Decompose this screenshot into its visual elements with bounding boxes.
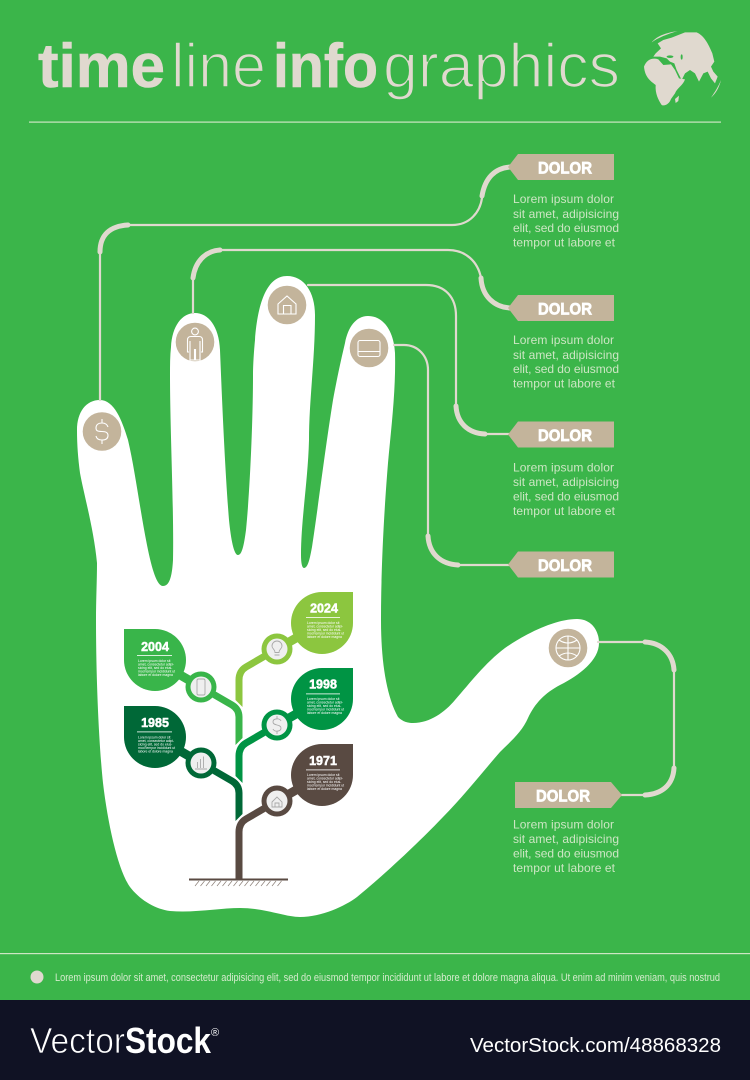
leaf text 1971: labore et dolore magna (307, 787, 342, 791)
tree branch 2024 (236, 592, 353, 707)
text block 2: sit amet, adipisicing (513, 348, 619, 362)
text block 1: sit amet, adipisicing (513, 207, 619, 221)
icon: basketball circle (549, 629, 587, 667)
watermark band (0, 1000, 750, 1080)
leaf text 2024 (306, 602, 344, 639)
icon: dollar (273, 716, 281, 734)
tag 2: DOLOR (538, 300, 592, 318)
leaf text 1985: labore et dolore magna (138, 750, 173, 754)
text block 1: tempor ut labore et (513, 236, 616, 250)
icon: house circle (268, 286, 306, 324)
tag 3 (508, 422, 614, 448)
tag 5 (515, 782, 622, 808)
icon: screen circle (350, 329, 388, 367)
text block 1: elit, sed do eiusmod (513, 221, 619, 235)
tree branch 1998 (236, 668, 353, 783)
leaf text 2004: Lorem ipsum dolor sit (138, 659, 170, 663)
leaf text 1971 (306, 754, 344, 791)
text block 3: elit, sed do eiusmod (513, 490, 619, 504)
title (38, 32, 620, 101)
tag 4: DOLOR (538, 557, 592, 575)
connector: ring finger to tag 2 (193, 250, 510, 313)
tag 3: DOLOR (538, 427, 592, 445)
logo: Vector (30, 1020, 125, 1061)
tree branch 1985 (124, 706, 242, 821)
leaf text 2004: 2004 (141, 640, 169, 654)
icon: bar chart (195, 756, 207, 769)
text block 3: sit amet, adipisicing (513, 475, 619, 489)
leaf text 2004: mod tempor incididunt ut (138, 670, 175, 674)
connector: middle finger to tag 3 (308, 285, 510, 434)
text block 2: tempor ut labore et (513, 376, 616, 390)
text block 2: Lorem ipsum dolor (513, 333, 614, 347)
leaf text 2004: amet, consectetur adipi- (138, 662, 174, 666)
icon: light bulb (272, 641, 282, 655)
header divider (29, 122, 721, 123)
connector: index finger to tag 4 (394, 345, 510, 565)
leaf text 2024: amet, consectetur adipi- (307, 624, 343, 628)
leaf text 1998: mod tempor incididunt ut (307, 708, 344, 712)
hand silhouette (77, 276, 599, 917)
tag 1: DOLOR (538, 160, 592, 178)
tag 1 (508, 154, 614, 180)
text block 3: tempor ut labore et (513, 504, 616, 518)
icon: globe (644, 31, 721, 105)
footer bullet (30, 970, 44, 984)
tree branch 2004 (124, 629, 242, 745)
icon: house (272, 797, 282, 807)
leaf text 2004: labore et dolore magna (138, 673, 173, 677)
tree trunk and branch 1971 (239, 744, 353, 879)
leaf text 1971: mod tempor incididunt ut (307, 784, 344, 788)
leaf text 1971: Lorem ipsum dolor sit (307, 773, 339, 777)
leaf text 2024: Lorem ipsum dolor sit (307, 621, 339, 625)
text block 5: elit, sed do eiusmod (513, 846, 619, 860)
leaf text 2024: labore et dolore magna (307, 635, 342, 639)
leaf text 2024: mod tempor incididunt ut (307, 632, 344, 636)
leaf text 1985 (137, 716, 175, 754)
logo (30, 1020, 219, 1061)
text block 5 (513, 818, 619, 875)
text block 5: sit amet, adipisicing (513, 832, 619, 846)
title: info (273, 32, 378, 101)
leaf text 1985: mod tempor incididunt ut (138, 746, 175, 750)
leaf text 2004: sicing elit, sed do eius- (138, 666, 172, 670)
text block 3: Lorem ipsum dolor (513, 460, 614, 474)
leaf text 1998: 1998 (309, 678, 337, 692)
footer divider (0, 953, 750, 954)
logo: ® (211, 1027, 219, 1039)
logo: Stock (125, 1020, 212, 1061)
leaf text 1998: labore et dolore magna (307, 711, 342, 715)
leaf text 1971: sicing elit, sed do eius- (307, 780, 341, 784)
tag 4 (508, 552, 614, 578)
text block 5: Lorem ipsum dolor (513, 818, 614, 832)
text block 1: Lorem ipsum dolor (513, 192, 614, 206)
connector: little finger to tag 1 (100, 167, 510, 400)
text block 1 (513, 192, 619, 250)
leaf text 1998 (306, 678, 344, 715)
leaf text 1985: 1985 (141, 716, 169, 730)
leaf text 2024: sicing elit, sed do eius- (307, 628, 341, 632)
icon: dollar circle (83, 412, 121, 451)
tag 5: DOLOR (536, 788, 590, 806)
leaf text 1985: amet, consectetur adipi- (138, 739, 174, 743)
leaf text 1998: Lorem ipsum dolor sit (307, 697, 339, 701)
text block 2 (513, 333, 619, 390)
text block 5: tempor ut labore et (513, 861, 616, 875)
tag 2 (508, 295, 614, 321)
leaf text 1985: sicing elit, sed do eius- (138, 742, 172, 746)
connector: thumb to tag 5 (598, 642, 674, 795)
title: graphics (383, 32, 620, 101)
tree ground (189, 878, 288, 886)
text block 2: elit, sed do eiusmod (513, 362, 619, 376)
icon: phone (197, 679, 205, 695)
image id: VectorStock.com/48868328 (470, 1035, 721, 1057)
leaf text 2024: 2024 (310, 602, 338, 616)
leaf text 1998: amet, consectetur adipi- (307, 700, 343, 704)
title: line (171, 32, 266, 101)
leaf text 1985: Lorem ipsum dolor sit (138, 736, 170, 740)
leaf text 1971: 1971 (309, 754, 337, 768)
title: time (38, 32, 165, 101)
leaf text 2004 (137, 640, 175, 677)
leaf text 1998: sicing elit, sed do eius- (307, 704, 341, 708)
text block 3 (513, 460, 619, 518)
leaf text 1971: amet, consectetur adipi- (307, 776, 343, 780)
icon: person circle (176, 323, 214, 361)
